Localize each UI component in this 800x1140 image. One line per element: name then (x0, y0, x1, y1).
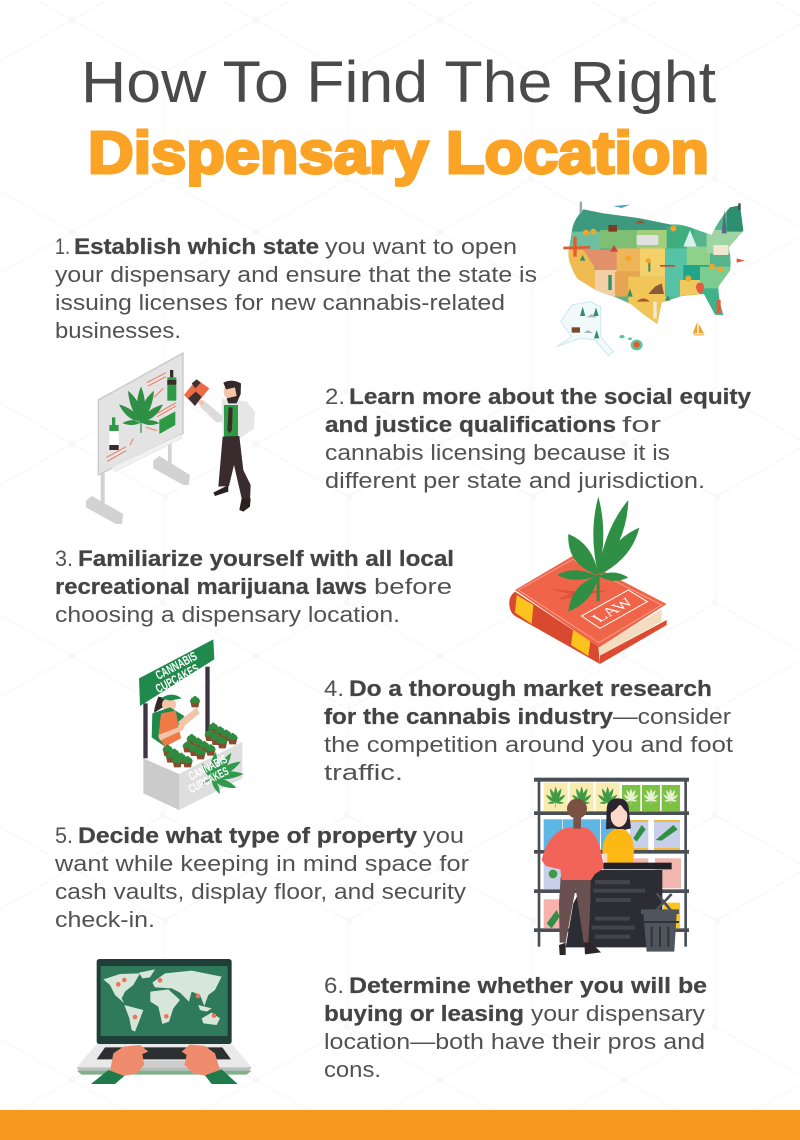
step 2 text: cannabis licensing because it is (325, 440, 670, 465)
red annotation lines (107, 373, 176, 461)
cannabis leaf (557, 497, 639, 612)
step 3 text: 3. (55, 546, 73, 571)
map landmarks (563, 202, 741, 318)
map landmass (568, 206, 744, 324)
map: Alaska (557, 302, 613, 356)
product bottles on board (109, 370, 176, 450)
laptop base (77, 1044, 252, 1075)
stall sign: CUPCAKES (153, 661, 202, 696)
world continents (103, 969, 222, 1032)
step 4 text: 4. (324, 676, 344, 701)
step 4 text: for the cannabis industry (324, 704, 614, 729)
step 2 text: for (622, 412, 661, 437)
stall sign (139, 639, 214, 706)
step 6 text: Determine whether you will be (349, 973, 707, 998)
icon: law book with cannabis leaf (509, 497, 667, 664)
step 6 text: location—both have their pros and (324, 1029, 705, 1054)
whiteboard panel (98, 353, 183, 475)
step 2 text (325, 384, 752, 493)
step 1 text: you want to open (325, 234, 517, 259)
icon: illustrated US map (557, 200, 747, 356)
stall sign: CANNABIS (153, 649, 199, 683)
step 1 text (55, 234, 537, 343)
footer bar (0, 1110, 800, 1140)
customer (542, 799, 604, 955)
icon: laptop with world map (77, 959, 252, 1084)
step 3 text: recreational marijuana laws (55, 574, 367, 599)
map: small boat (737, 258, 745, 263)
cover leaf shadow (548, 588, 612, 600)
shopping basket (641, 893, 679, 952)
step 4 text: Do a thorough market research (349, 676, 712, 701)
step 4 text: traffic. (324, 760, 403, 785)
step 4 text: —consider (613, 704, 731, 729)
step 3 text: choosing a dispensary location. (55, 602, 400, 627)
step 5 text: 5. (55, 823, 73, 848)
book pages (598, 609, 662, 656)
step 1 text: 1. (55, 234, 70, 259)
LAW plate: LAW (588, 596, 639, 625)
step 1 text: issuing licenses for new cannabis-related (55, 290, 505, 315)
map: moose and trees (572, 307, 599, 338)
step 1 text: your dispensary and ensure that the state is (55, 262, 537, 287)
presenter figure (184, 379, 255, 512)
step 6 text: cons. (324, 1057, 381, 1082)
stall posts (143, 667, 210, 758)
step 1 text: Establish which state (74, 234, 319, 259)
title (81, 50, 716, 186)
step 5 text: cash vaults, display floor, and security (55, 879, 466, 904)
counter (566, 863, 672, 947)
map: sailboat (693, 322, 705, 335)
step 2 text: and justice qualifications (325, 412, 616, 437)
back cover (600, 620, 667, 664)
front cover (515, 556, 667, 647)
shelf packs lower rows (544, 819, 681, 928)
whiteboard stand (86, 442, 190, 524)
step 4 text: the competition around you and foot (324, 732, 733, 757)
title line 2: Dispensary Location (88, 120, 709, 186)
step 3 text: before (374, 574, 452, 599)
step 2 text: 2. (325, 384, 345, 409)
shelf packs top row (544, 783, 680, 811)
step 5 text: Decide what type of property (78, 823, 418, 848)
step 2 text: different per state and jurisdiction. (325, 468, 705, 493)
icon: whiteboard and presenter (86, 353, 255, 524)
laptop screen (97, 959, 232, 1044)
icon: dispensary shelves and counter (534, 778, 689, 955)
vendor (152, 695, 200, 747)
cannabis leaf on board (119, 387, 163, 433)
step 4 text (324, 676, 733, 785)
step 3 text (55, 546, 454, 627)
stall counter: CANNABIS (186, 752, 229, 783)
shopkeeper (602, 798, 634, 864)
step 6 text: buying or leasing (324, 1001, 524, 1026)
step 5 text: you (423, 823, 464, 848)
step 5 text: check-in. (55, 907, 155, 932)
map pins (116, 978, 216, 1019)
step 2 text: Learn more about the social equity (349, 384, 752, 409)
step 5 text: want while keeping in mind space for (54, 851, 469, 876)
step 5 text (54, 823, 469, 932)
stall counter (143, 742, 251, 810)
step 6 text (324, 973, 707, 1082)
step 3 text: Familiarize yourself with all local (78, 546, 454, 571)
swatch card (184, 379, 209, 406)
stall counter: CUPCAKES (186, 764, 231, 796)
hands (91, 1044, 238, 1084)
step 6 text: your dispensary (531, 1001, 705, 1026)
LAW plate (582, 590, 647, 628)
title line 1: How To Find The Right (81, 50, 716, 115)
book spine (509, 592, 600, 664)
map: Hawaii (619, 335, 643, 350)
step 1 text: businesses. (55, 318, 181, 343)
step 6 text: 6. (324, 973, 344, 998)
cupcake rows (163, 722, 238, 767)
shelving (534, 778, 689, 947)
icon: cannabis cupcakes stall (139, 639, 251, 810)
